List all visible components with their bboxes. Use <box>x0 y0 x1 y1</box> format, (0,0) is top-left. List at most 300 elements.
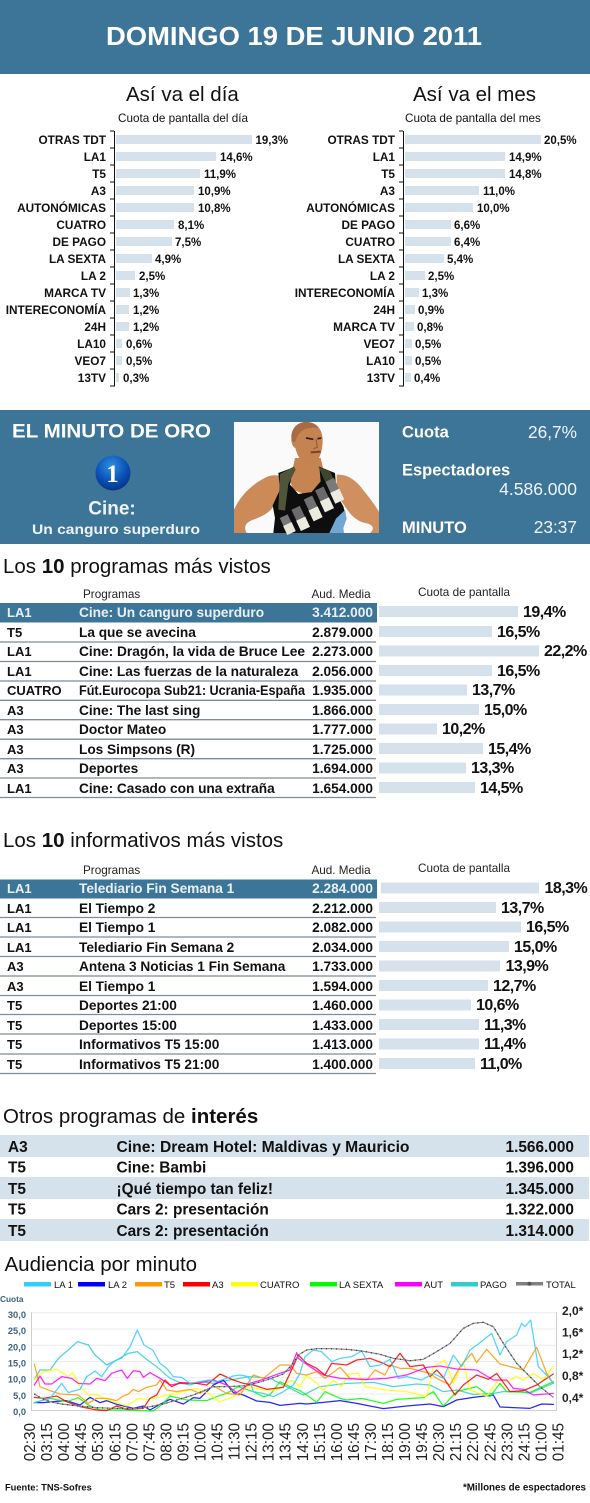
programme names: La que se avecina <box>79 625 196 640</box>
programme names: Telediario Fin Semana 1 <box>79 881 235 896</box>
x axis time labels: 05:30 <box>90 1423 107 1461</box>
chest and neck <box>290 458 325 494</box>
audience numbers: 1.777.000 <box>312 722 373 737</box>
highlighted row <box>0 880 377 898</box>
category labels: mes: T5 <box>381 167 395 181</box>
x axis time labels: 18:15 <box>380 1423 397 1461</box>
category labels: día: LA SEXTA <box>49 252 106 266</box>
values: día: 19,3% <box>256 135 288 147</box>
photo: actor with baby bottles <box>234 422 379 535</box>
audience numbers: 2.056.000 <box>312 664 373 679</box>
category labels: día: 24H <box>84 320 106 334</box>
series: TOTAL <box>34 1322 553 1409</box>
series: TOTAL markers <box>34 1322 553 1409</box>
values: día <box>123 135 288 385</box>
panel: tabla informativos <box>0 862 587 1074</box>
share values: 11,4% <box>484 1036 526 1053</box>
x axis time labels: 08:30 <box>158 1423 175 1461</box>
x axis time labels: 04:00 <box>56 1423 73 1461</box>
bottles <box>279 478 344 535</box>
channels: A3 <box>7 959 24 974</box>
category labels: día: LA 2 <box>81 269 106 283</box>
share values: 15,0% <box>484 702 527 719</box>
programme names: Informativos T5 21:00 <box>79 1057 220 1072</box>
category labels: mes: CUATRO <box>345 235 395 249</box>
x axis time labels: 01:45 <box>550 1423 568 1461</box>
share values: 13,7% <box>501 900 544 917</box>
heading: así va el mes: Así va el mes <box>413 83 536 106</box>
category labels: mes <box>295 133 396 385</box>
share values: 15,0% <box>514 939 557 956</box>
series: A3 <box>34 1353 553 1411</box>
audience numbers: 1.733.000 <box>312 959 373 974</box>
programme names <box>116 1139 410 1240</box>
channels: A3 <box>7 742 24 757</box>
programme names: Cine: Bambi <box>116 1160 206 1176</box>
channels: T5 <box>7 625 22 640</box>
audience numbers: 3.412.000 <box>312 605 373 620</box>
x axis time labels: 02:30 <box>22 1423 39 1461</box>
channels: LA1 <box>7 940 32 955</box>
column headers: Cuota de pantalla <box>418 862 510 875</box>
category labels: día <box>6 133 107 385</box>
striped rows <box>0 1135 589 1241</box>
category labels: día: MARCA TV <box>44 286 106 300</box>
audience numbers <box>506 1139 574 1240</box>
straps <box>278 466 296 511</box>
axis <box>399 131 404 386</box>
channels: T5 <box>8 1223 26 1240</box>
channels: LA1 <box>7 920 32 935</box>
x axis time labels: 15:15 <box>312 1423 329 1461</box>
audience numbers: 1.594.000 <box>312 979 373 994</box>
series: CUATRO <box>34 1360 553 1406</box>
stat: espectadores <box>402 462 577 499</box>
category labels: mes: LA SEXTA <box>338 252 395 266</box>
programme names: Cine: Dream Hotel: Maldivas y Mauricio <box>116 1139 410 1156</box>
channels: LA1 <box>7 781 32 796</box>
values: día: 10,9% <box>198 186 231 198</box>
share values: 11,0% <box>480 1056 522 1073</box>
channels: A3 <box>7 722 24 737</box>
category labels: mes: LA1 <box>373 150 395 164</box>
x axis time labels: 09:15 <box>176 1423 192 1461</box>
channels <box>8 1139 28 1240</box>
programme names: Los Simpsons (R) <box>79 742 195 757</box>
category labels: mes: MARCA TV <box>333 320 395 334</box>
channels: T5 <box>8 1202 26 1218</box>
category labels: día: INTERECONOMÍA <box>6 303 106 317</box>
category labels: mes: INTERECONOMÍA <box>295 286 395 300</box>
category labels: día: A3 <box>91 184 106 198</box>
x axis time labels: 24:15 <box>516 1423 533 1461</box>
legend: A3 <box>212 1280 224 1291</box>
bars: mes <box>405 135 541 382</box>
heading: otros programas: Otros programas de interés <box>3 1105 258 1128</box>
channels: T5 <box>7 998 22 1013</box>
share values: 14,5% <box>480 780 523 797</box>
right arm <box>337 475 379 533</box>
values: mes: 6,6% <box>454 220 480 232</box>
category labels: mes: 13TV <box>367 371 395 385</box>
title banner: DOMINGO 19 DE JUNIO 2011 <box>106 21 482 51</box>
channels: LA1 <box>7 644 32 659</box>
audience numbers: 1.694.000 <box>312 761 373 776</box>
heading: audiencia por minuto: Audiencia por minuto <box>4 1253 197 1276</box>
channels: LA1 <box>7 901 32 916</box>
audience numbers: 1.935.000 <box>312 683 373 698</box>
category labels: mes: DE PAGO <box>341 218 395 232</box>
x axis time labels: 22:45 <box>482 1423 499 1461</box>
audience numbers: 2.034.000 <box>312 940 373 955</box>
x axis time labels: 19:00 <box>397 1423 414 1461</box>
right axis labels: 1,6* <box>562 1326 584 1340</box>
category labels: mes: OTRAS TDT <box>328 133 396 147</box>
heading: los 10 programas: Los 10 programas más vistos <box>3 555 271 578</box>
channels: LA1 <box>7 664 32 679</box>
x axis time labels: 21:15 <box>448 1423 465 1461</box>
audience numbers: 2.879.000 <box>312 625 373 640</box>
category labels: día: OTRAS TDT <box>38 133 107 147</box>
tank top <box>273 467 345 533</box>
category labels: día: VEO7 <box>75 354 106 368</box>
programme name: Cine: <box>88 498 136 520</box>
share bars <box>379 606 539 793</box>
series: PAGO <box>34 1342 553 1395</box>
programme names: ¡Qué tiempo tan feliz! <box>116 1181 273 1198</box>
programme names: Deportes <box>79 761 139 776</box>
audience numbers <box>312 605 373 796</box>
channels: T5 <box>8 1181 26 1198</box>
x axis time labels: 23:30 <box>499 1423 516 1461</box>
values: mes: 0,9% <box>418 305 444 317</box>
values: día: 8,1% <box>178 220 204 232</box>
programme names: Doctor Mateo <box>79 722 166 737</box>
row lines <box>0 918 376 1074</box>
column headers: Aud. Media <box>312 864 371 877</box>
stat: espectadores: Espectadores <box>402 462 510 480</box>
x axis time labels: 13:00 <box>261 1423 278 1461</box>
left axis labels: 0,0 <box>13 1407 26 1417</box>
subtitle: cuota del mes: Cuota de pantalla del mes <box>405 112 541 125</box>
x axis time labels: 04:45 <box>73 1423 90 1461</box>
stat: cuota <box>402 422 577 442</box>
x axis time labels: 13:45 <box>278 1423 295 1461</box>
values: día: 0,6% <box>126 339 152 351</box>
category labels: día: AUTONÓMICAS <box>17 201 106 215</box>
x axis time labels: 07:00 <box>124 1423 141 1461</box>
values: día: 0,5% <box>126 356 152 368</box>
x axis time labels: 07:45 <box>141 1423 158 1461</box>
values: mes: 14,9% <box>509 152 542 164</box>
channels: A3 <box>7 761 24 776</box>
audience numbers: 1.460.000 <box>312 998 373 1013</box>
programme names: Deportes 15:00 <box>79 1018 177 1033</box>
x axis time labels: 20:30 <box>431 1423 448 1461</box>
icon: La 1 logo <box>96 456 130 490</box>
channels: LA1 <box>7 881 32 896</box>
x axis time labels: 12:15 <box>244 1423 261 1461</box>
share values: 15,4% <box>488 741 531 758</box>
programme names: Cars 2: presentación <box>116 1223 269 1240</box>
highlighted row <box>0 603 377 622</box>
left axis labels: 30,0 <box>8 1310 26 1320</box>
category labels: día: T5 <box>92 167 106 181</box>
x axis time labels: 16:00 <box>329 1423 346 1461</box>
programme names: Informativos T5 15:00 <box>79 1037 220 1052</box>
audience numbers: 1.433.000 <box>312 1018 373 1033</box>
programme names <box>79 605 305 796</box>
column headers <box>83 862 510 877</box>
panel: tabla programas <box>0 586 587 798</box>
legend: AUT <box>424 1280 443 1291</box>
values: mes: 0,5% <box>415 356 441 368</box>
panel: así va el mes <box>295 83 577 386</box>
face <box>306 438 321 439</box>
right axis labels: 0,4* <box>562 1391 584 1405</box>
left axis labels <box>8 1310 26 1417</box>
audience numbers: 1.322.000 <box>506 1202 574 1218</box>
values: mes: 0,4% <box>414 373 440 385</box>
values: día: 2,5% <box>139 271 165 283</box>
title banner <box>0 0 590 74</box>
left arm <box>234 475 285 533</box>
stat: cuota: Cuota <box>402 424 450 442</box>
programme names: Deportes 21:00 <box>79 998 177 1013</box>
left axis labels: 5,0 <box>13 1391 26 1401</box>
category labels: mes: LA 2 <box>370 269 395 283</box>
x axis time labels: 10:00 <box>192 1423 210 1461</box>
values: día: 14,6% <box>220 152 253 164</box>
share values: 16,5% <box>526 919 569 936</box>
share values: 12,7% <box>493 978 536 995</box>
share values <box>476 880 587 1073</box>
share values: 13,9% <box>506 958 548 975</box>
bars: día <box>116 135 252 382</box>
values: mes: 0,5% <box>415 339 441 351</box>
heading: los 10 informativos: Los 10 informativos más vistos <box>3 829 283 852</box>
values: día: 1,3% <box>133 288 159 300</box>
panel: otros programas table <box>0 1135 589 1241</box>
programme names: El Tiempo 1 <box>79 920 156 935</box>
share values: 13,3% <box>471 760 514 777</box>
line series <box>34 1320 553 1411</box>
category labels: mes: 24H <box>373 303 395 317</box>
share values: 13,7% <box>472 682 515 699</box>
programme name: Un canguro superduro <box>32 521 200 537</box>
right axis labels <box>562 1304 584 1405</box>
programme names: Cars 2: presentación <box>116 1202 269 1218</box>
programme names <box>79 881 286 1072</box>
share values: 22,2% <box>544 643 587 660</box>
values: día: 7,5% <box>175 237 201 249</box>
audience numbers: 1.413.000 <box>312 1037 373 1052</box>
legend: T5 <box>164 1280 175 1291</box>
x axis time labels: 10:45 <box>210 1423 226 1461</box>
legend: LA SEXTA <box>339 1280 384 1291</box>
x axis time labels: 14:30 <box>295 1423 312 1461</box>
stat: minuto <box>402 517 577 537</box>
programme name <box>32 498 200 537</box>
share values <box>442 604 587 797</box>
legend: LA 2 <box>108 1280 127 1291</box>
column headers: Aud. Media <box>312 588 371 601</box>
channels: T5 <box>7 1057 22 1072</box>
audience numbers: 1.866.000 <box>312 703 373 718</box>
x axis time labels: 19:45 <box>414 1423 431 1461</box>
x axis time labels: 22:00 <box>465 1423 482 1461</box>
share values: 18,3% <box>544 880 587 897</box>
left axis labels: 10,0 <box>8 1374 26 1384</box>
legend: TOTAL <box>546 1280 576 1291</box>
channels: CUATRO <box>7 683 62 698</box>
values: mes: 1,3% <box>422 288 448 300</box>
row lines <box>0 642 376 798</box>
programme names: Antena 3 Noticias 1 Fin Semana <box>79 959 286 974</box>
values: mes: 0,8% <box>417 322 443 334</box>
right axis labels: 2,0* <box>562 1304 584 1318</box>
legend: LA 1 <box>54 1280 73 1291</box>
series: LA SEXTA <box>34 1382 553 1411</box>
programme names: El Tiempo 1 <box>79 979 156 994</box>
values: día: 4,9% <box>155 254 181 266</box>
share values: 19,4% <box>523 604 566 621</box>
values: mes: 2,5% <box>428 271 454 283</box>
axis <box>110 131 114 386</box>
x axis time labels: 06:15 <box>107 1423 124 1461</box>
x axis time labels <box>22 1423 568 1461</box>
share values: 10,2% <box>442 721 485 738</box>
heading: así va el día: Así va el día <box>126 83 239 106</box>
category labels: mes: LA10 <box>366 354 395 368</box>
left axis labels: 20,0 <box>8 1342 26 1352</box>
values: día: 11,9% <box>204 169 236 181</box>
panel: el minuto de oro <box>0 410 590 544</box>
audience numbers: 2.212.000 <box>312 901 373 916</box>
share values: 11,3% <box>484 1017 526 1034</box>
right axis labels: 1,2* <box>562 1347 584 1361</box>
column headers: Programas <box>83 588 140 601</box>
category labels: mes: AUTONÓMICAS <box>306 201 395 215</box>
values: mes: 10,0% <box>477 203 510 215</box>
programme names: Cine: Dragón, la vida de Bruce Lee <box>79 644 305 659</box>
channels: T5 <box>7 1018 22 1033</box>
category labels: mes: A3 <box>380 184 395 198</box>
values: día: 10,8% <box>198 203 231 215</box>
audience numbers: 2.284.000 <box>312 881 373 896</box>
heading: el minuto de oro: EL MINUTO DE ORO <box>12 422 211 442</box>
footnote: *Millones de espectadores <box>463 1482 587 1494</box>
panel: así va el día <box>6 83 288 386</box>
channels: T5 <box>7 1037 22 1052</box>
programme names: Fút.Eurocopa Sub21: Ucrania-España <box>79 683 305 698</box>
channels: T5 <box>8 1160 26 1176</box>
category labels: día: DE PAGO <box>52 235 106 249</box>
audience numbers <box>312 881 373 1072</box>
subtitle: cuota del día: Cuota de pantalla del día <box>118 112 248 125</box>
audience numbers: 1.725.000 <box>312 742 373 757</box>
values: día: 1,2% <box>133 322 159 334</box>
category labels: mes: VEO7 <box>364 337 395 351</box>
column headers: Cuota de pantalla <box>418 586 510 599</box>
icon: La 1 logo: 1 <box>106 461 119 488</box>
programme names: Cine: The last sing <box>79 703 200 718</box>
x axis time labels: 16:45 <box>346 1423 363 1461</box>
head <box>291 422 323 466</box>
series: LA 2 <box>34 1380 553 1410</box>
left axis labels: 25,0 <box>8 1326 26 1336</box>
x axis time labels: 11:30 <box>227 1423 244 1460</box>
values: mes <box>414 135 577 385</box>
channels: A3 <box>8 1139 28 1156</box>
channels <box>7 605 62 796</box>
x axis time labels: 17:30 <box>363 1423 380 1461</box>
legend: CUATRO <box>260 1280 299 1291</box>
share values: 10,6% <box>476 997 519 1014</box>
panel: audiencia por minuto chart <box>0 1280 584 1461</box>
stat: espectadores: 4.586.000 <box>499 479 577 499</box>
values: día: 0,3% <box>123 373 149 385</box>
audience numbers: 1.345.000 <box>506 1181 574 1198</box>
values: mes: 20,5% <box>544 135 577 147</box>
column headers <box>83 586 510 601</box>
channels: A3 <box>7 703 24 718</box>
source note: Fuente: TNS-Sofres <box>5 1482 92 1492</box>
category labels: día: LA10 <box>77 337 106 351</box>
audience numbers: 1.314.000 <box>506 1223 574 1240</box>
values: día: 1,2% <box>133 305 159 317</box>
stat: minuto: MINUTO <box>402 519 467 537</box>
values: mes: 14,8% <box>509 169 542 181</box>
values: mes: 5,4% <box>447 254 473 266</box>
channels: LA1 <box>7 605 32 620</box>
values: mes: 6,4% <box>454 237 480 249</box>
stat: cuota: 26,7% <box>528 422 577 442</box>
channels <box>7 881 32 1072</box>
audience numbers: 1.654.000 <box>312 781 373 796</box>
audience numbers: 1.396.000 <box>506 1160 574 1176</box>
left axis labels: 15,0 <box>8 1358 26 1368</box>
audience numbers: 2.082.000 <box>312 920 373 935</box>
share values: 16,5% <box>497 624 540 641</box>
share bars <box>379 882 539 1069</box>
blue toy <box>329 510 347 533</box>
series: LA 1 <box>34 1320 553 1403</box>
share values: 16,5% <box>497 663 540 680</box>
column headers: Programas <box>83 864 140 877</box>
category labels: día: 13TV <box>78 371 106 385</box>
programme names: El Tiempo 2 <box>79 901 156 916</box>
x axis time labels: 03:15 <box>39 1423 56 1461</box>
category labels: día: LA1 <box>84 150 106 164</box>
programme names: Cine: Un canguro superduro <box>79 605 264 620</box>
programme names: Cine: Casado con una extraña <box>79 781 275 796</box>
programme names: Cine: Las fuerzas de la naturaleza <box>79 664 299 679</box>
series: T5 <box>34 1347 553 1403</box>
series: AUT <box>34 1353 553 1395</box>
legend: PAGO <box>480 1280 507 1291</box>
y axis title: Cuota <box>0 1294 24 1304</box>
right axis labels: 0,8* <box>562 1369 584 1383</box>
x axis time labels: 01:00 <box>533 1423 550 1461</box>
values: mes: 11,0% <box>483 186 515 198</box>
audience numbers: 1.400.000 <box>312 1057 373 1072</box>
channels: A3 <box>7 979 24 994</box>
audience numbers: 2.273.000 <box>312 644 373 659</box>
category labels: día: CUATRO <box>56 218 106 232</box>
legend <box>24 1280 576 1291</box>
programme names: Telediario Fin Semana 2 <box>79 940 235 955</box>
